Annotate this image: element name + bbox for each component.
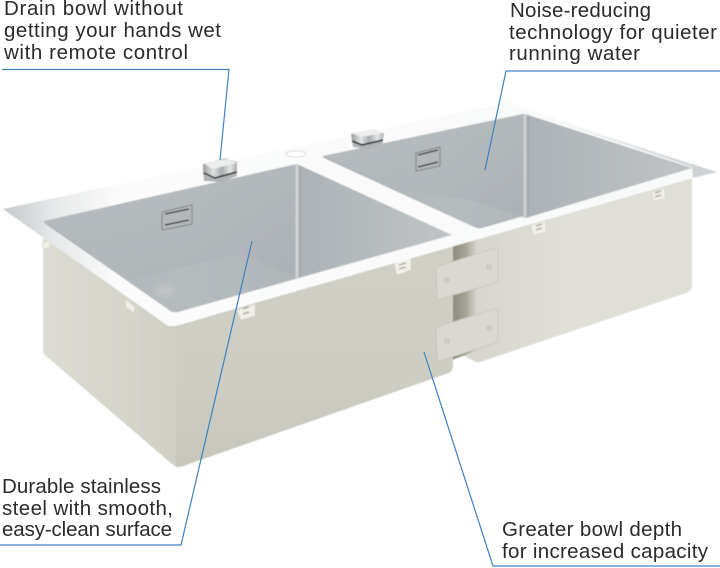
dark gap between basins xyxy=(452,236,477,360)
callout line: bowl depth xyxy=(424,352,720,566)
rim right tip shading xyxy=(525,111,717,178)
left bowl base xyxy=(44,164,452,312)
right bowl right wall xyxy=(525,114,692,218)
left basin front face xyxy=(176,245,453,467)
right overflow xyxy=(416,147,440,171)
sink top rim xyxy=(3,102,717,326)
callout text: bowl depth xyxy=(502,518,709,563)
connecting plates xyxy=(436,248,498,361)
left bowl right wall xyxy=(297,164,452,278)
callout text: bowl depth: for increased capacity xyxy=(502,540,709,563)
right bowl xyxy=(323,114,692,228)
left basin side face xyxy=(43,238,178,468)
upper plate xyxy=(436,248,498,299)
callout line: remote control xyxy=(2,70,229,160)
callout line: stainless steel xyxy=(0,241,252,545)
tap hole xyxy=(286,151,306,157)
callout text: bowl depth: Greater bowl depth xyxy=(502,518,682,541)
callout text: stainless steel: Durable stainless xyxy=(2,475,161,498)
left bowl corner xyxy=(296,164,298,278)
left bowl floor highlight xyxy=(155,285,175,297)
sink illustration xyxy=(3,102,717,468)
right basin body xyxy=(453,176,692,362)
left overflow xyxy=(162,205,192,230)
lower plate xyxy=(436,309,498,361)
callout text: stainless steel: easy-clean surface xyxy=(2,518,172,541)
remote button left xyxy=(203,158,237,182)
right bowl back wall xyxy=(323,114,525,218)
callout text: stainless steel: steel with smooth, xyxy=(2,497,173,520)
left bowl back wall xyxy=(44,164,297,280)
left bowl xyxy=(44,164,452,312)
right bowl corner xyxy=(524,114,526,218)
callout text: noise reduction xyxy=(509,0,717,65)
callout text: remote control xyxy=(3,0,221,64)
callout text: noise reduction: technology for quieter xyxy=(509,21,717,44)
remote button right xyxy=(351,129,384,149)
callout text: remote control: getting your hands wet xyxy=(4,19,221,42)
mounting clips xyxy=(42,188,665,320)
right bowl base xyxy=(323,114,692,228)
callout text: stainless steel xyxy=(2,475,173,541)
callout text: remote control: with remote control xyxy=(3,41,188,64)
callout line: noise reduction xyxy=(485,71,720,170)
callout text: noise reduction: running water xyxy=(509,42,640,65)
